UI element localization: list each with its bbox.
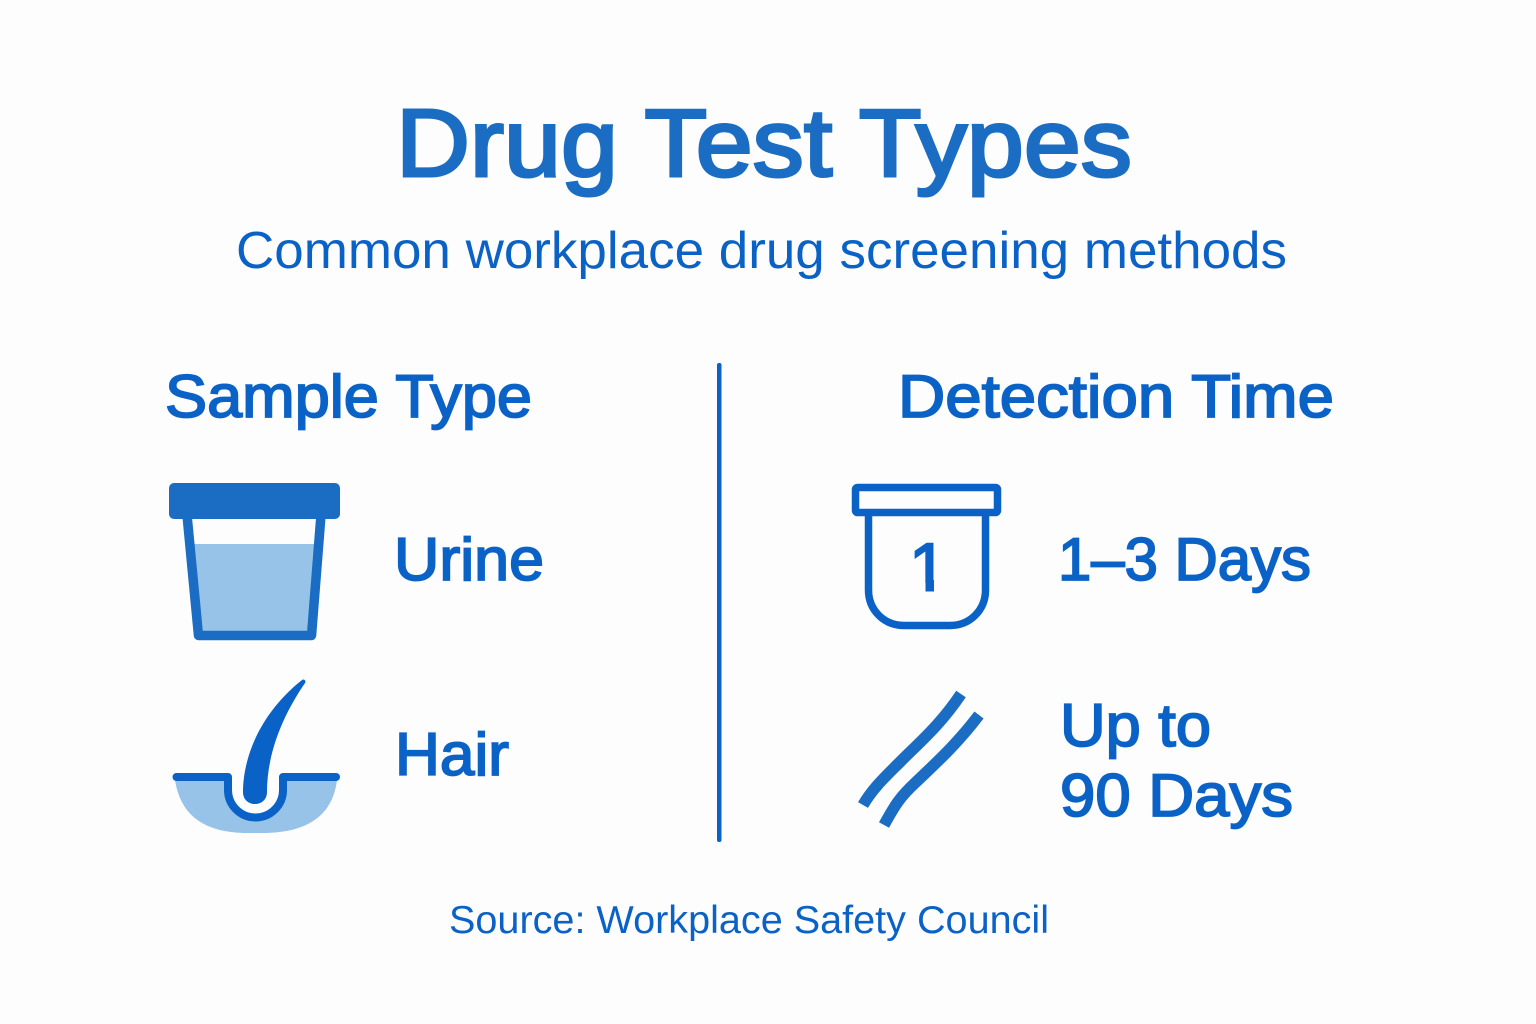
label: hair: Hair (395, 721, 509, 788)
label: urine: Urine (394, 526, 544, 593)
icon: urine cup (169, 483, 340, 636)
icon: one-day cup (856, 488, 998, 626)
subtitle: Common workplace drug screening methods (236, 222, 1287, 280)
label: up to: Up to (1060, 692, 1211, 759)
label: 90 days: 90 Days (1060, 762, 1293, 829)
source note: Source: Workplace Safety Council (449, 899, 1049, 942)
heading: detection time: Detection Time (898, 363, 1334, 430)
heading: sample type: Sample Type (165, 363, 532, 430)
label: 1-3 days: 1–3 Days (1058, 526, 1311, 593)
icon: hair follicle (175, 680, 337, 833)
icon: hair strands (863, 694, 979, 825)
title: Drug Test Types (396, 90, 1132, 197)
icon numeral: 1 (909, 529, 947, 606)
divider between columns (717, 363, 722, 842)
